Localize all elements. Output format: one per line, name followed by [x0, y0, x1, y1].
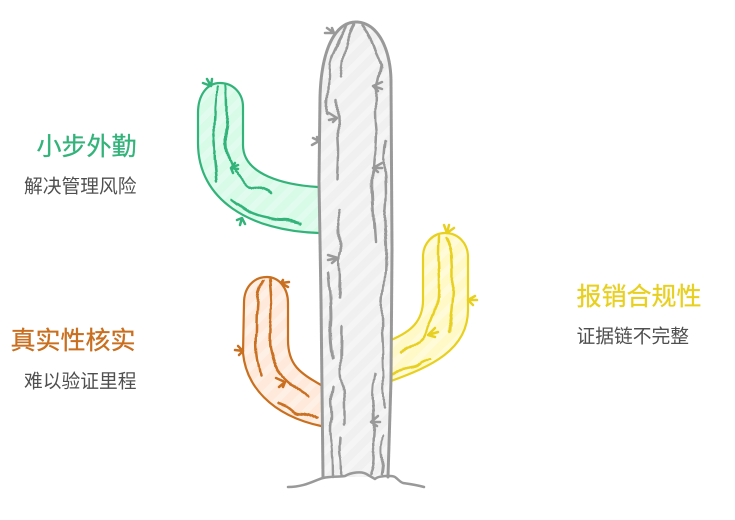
description: 解决管理风险 — [24, 176, 137, 196]
description: 难以验证里程 — [24, 370, 137, 392]
label: field work — [24, 133, 137, 196]
cactus trunk — [312, 22, 392, 477]
label: authenticity check — [10, 327, 137, 392]
heading: 报销合规性 — [576, 283, 702, 311]
ground line — [288, 472, 424, 487]
description: 证据链不完整 — [576, 326, 689, 346]
green arm — [198, 79, 319, 233]
heading: 真实性核实 — [10, 327, 136, 355]
orange arm — [235, 277, 321, 426]
label: reimbursement compliance — [576, 283, 702, 346]
heading: 小步外勤 — [36, 133, 136, 161]
yellow arm — [391, 225, 477, 381]
